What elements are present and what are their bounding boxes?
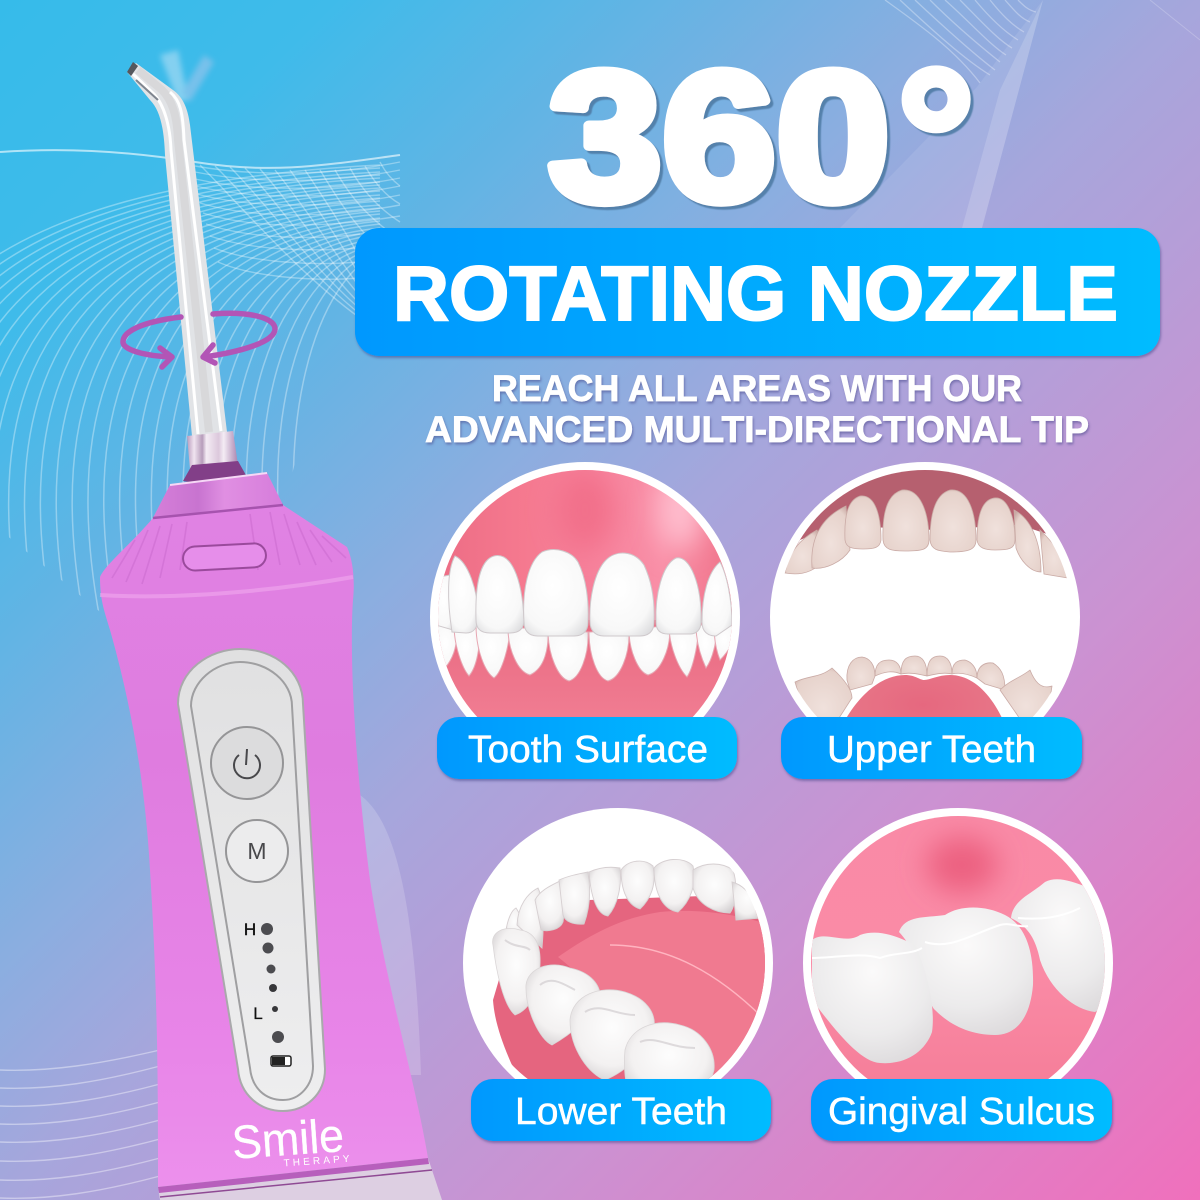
teeth [812, 879, 1115, 1063]
rotation arrows [123, 313, 275, 367]
shoulder ribbing [112, 512, 346, 584]
subheading: REACH ALL AREAS WITH OUR [492, 368, 1022, 409]
feature: gingival sulcus [800, 805, 1120, 1141]
molars [492, 928, 715, 1079]
pressure indicator: H [244, 920, 256, 939]
tongue [847, 675, 1002, 717]
water spray ghost [160, 50, 214, 102]
device: water flosser [100, 50, 442, 1200]
subheading [425, 368, 1089, 450]
lower teeth [436, 625, 736, 681]
label pill: Lower Teeth [515, 1091, 727, 1133]
title: 360 degrees [548, 29, 975, 247]
feature: upper teeth [770, 460, 1082, 779]
headline pill: rotating nozzle: ROTATING NOZZLE [393, 251, 1118, 337]
background line pattern: lower left [0, 1050, 160, 1198]
photo circle [430, 462, 740, 717]
label pill: Tooth Surface [468, 729, 708, 771]
cap ring [153, 473, 283, 518]
brand logo: THERAPY [283, 1154, 350, 1169]
control panel [178, 649, 325, 1111]
photo circle [463, 808, 773, 1079]
label pill [781, 717, 1082, 779]
back row teeth [506, 859, 762, 948]
water tank [158, 1158, 442, 1200]
brand logo: Smile [230, 1108, 346, 1169]
mode button: M [247, 838, 267, 864]
subheading: ADVANCED MULTI-DIRECTIONAL TIP [425, 409, 1089, 450]
title: 360 degrees: 360 [548, 33, 890, 239]
photo circle [803, 808, 1113, 1079]
label pill [471, 1079, 771, 1141]
background line pattern: upper right beams [840, 0, 1200, 228]
feature: lower teeth [463, 808, 773, 1141]
nozzle collar [183, 431, 247, 484]
bottom arch teeth [794, 656, 1052, 717]
nozzle tube [127, 62, 227, 436]
power slot [182, 543, 267, 571]
pressure indicator [244, 920, 284, 1043]
background pattern: light lobe right of handle [360, 795, 421, 1075]
photo circle [770, 462, 1080, 717]
label pill: Upper Teeth [827, 729, 1036, 771]
feature: tooth surface [430, 460, 740, 780]
pressure indicator: L [253, 1004, 263, 1023]
label pill [437, 717, 737, 779]
molar cusps [505, 940, 695, 1048]
title: 360 degrees: ° [897, 29, 975, 247]
device shoulder and body [100, 473, 428, 1187]
background line pattern: wave mesh [0, 150, 400, 318]
top arch teeth [785, 490, 1068, 578]
headline pill: rotating nozzle [355, 228, 1160, 356]
body highlight band [100, 577, 353, 596]
label pill [811, 1079, 1112, 1141]
label pill: Gingival Sulcus [828, 1091, 1095, 1133]
mode button [226, 820, 288, 882]
upper teeth [434, 550, 732, 636]
battery icon [271, 1056, 291, 1066]
power button [211, 727, 283, 799]
background line pattern: nested arcs [0, 165, 380, 640]
